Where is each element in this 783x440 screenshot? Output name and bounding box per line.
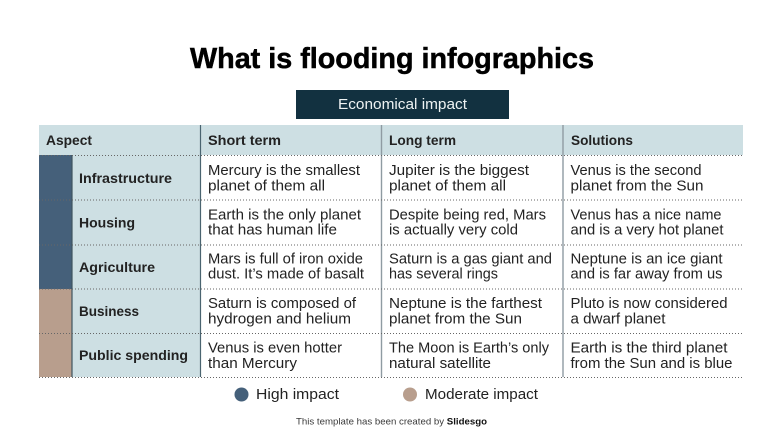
row: business: Saturn is composed of (208, 296, 357, 312)
row: public spending (79, 340, 732, 372)
row: housing: is actually very cold (389, 223, 518, 239)
row: public spending: The Moon is Earth’s only (389, 340, 550, 356)
title: What is flooding infographics (190, 43, 594, 75)
row: business: Business (79, 304, 139, 320)
row: housing: Despite being red, Mars (389, 208, 546, 224)
row: infrastructure: planet of them all (208, 178, 325, 194)
row: agriculture: dust. It’s made of basalt (208, 267, 364, 283)
row: housing: Venus has a nice name (570, 208, 722, 224)
banner: economical impact: Economical impact (338, 97, 467, 113)
row: public spending: natural satellite (389, 356, 491, 372)
row: agriculture: has several rings (389, 267, 498, 283)
row: business: Neptune is the farthest (389, 296, 542, 312)
legend: moderate impact: Moderate impact (425, 387, 538, 403)
header row (39, 125, 743, 155)
row: infrastructure (79, 163, 704, 194)
header row: Short term (208, 133, 281, 149)
impact colour: high (39, 155, 72, 289)
banner: economical impact (296, 90, 509, 119)
row: agriculture: Saturn is a gas giant and (389, 252, 552, 268)
row: infrastructure: Mercury is the smallest (208, 163, 360, 179)
row: infrastructure: Infrastructure (79, 171, 172, 187)
row: agriculture: Mars is full of iron oxide (208, 252, 363, 268)
row: business: planet from the Sun (389, 312, 522, 328)
credit line: This template has been created by Slidesgo (296, 416, 487, 428)
row: public spending: Venus is even hotter (208, 340, 342, 356)
row: housing: Earth is the only planet (208, 208, 361, 224)
row: agriculture: Neptune is an ice giant (570, 252, 722, 268)
table (39, 125, 743, 378)
row: housing (79, 208, 724, 239)
row: agriculture (79, 252, 722, 283)
row: business: a dwarf planet (570, 312, 666, 328)
row: business (79, 296, 728, 328)
row: housing: Housing (79, 216, 135, 232)
row: infrastructure: Venus is the second (570, 163, 702, 179)
legend: high impact: High impact (256, 387, 339, 403)
aspect column background (72, 155, 200, 377)
row: public spending: from the Sun and is blue (570, 356, 732, 372)
row: business: hydrogen and helium (208, 312, 351, 328)
row: public spending: than Mercury (208, 356, 298, 372)
row: infrastructure: planet of them all (389, 178, 506, 194)
header row: Aspect (46, 133, 92, 149)
row: business: Pluto is now considered (570, 296, 728, 312)
row: housing: and is a very hot planet (570, 223, 724, 239)
header row: Long term (389, 133, 456, 149)
row: public spending: Public spending (79, 348, 188, 364)
row: infrastructure: planet from the Sun (570, 178, 704, 194)
row: agriculture: Agriculture (79, 260, 155, 276)
impact colour: moderate (39, 289, 72, 377)
header row: Solutions (571, 133, 633, 149)
row: public spending: Earth is the third planet (570, 340, 728, 356)
row: infrastructure: Jupiter is the biggest (389, 163, 529, 179)
row: housing: that has human life (208, 223, 337, 239)
row: agriculture: and is far away from us (570, 267, 722, 283)
